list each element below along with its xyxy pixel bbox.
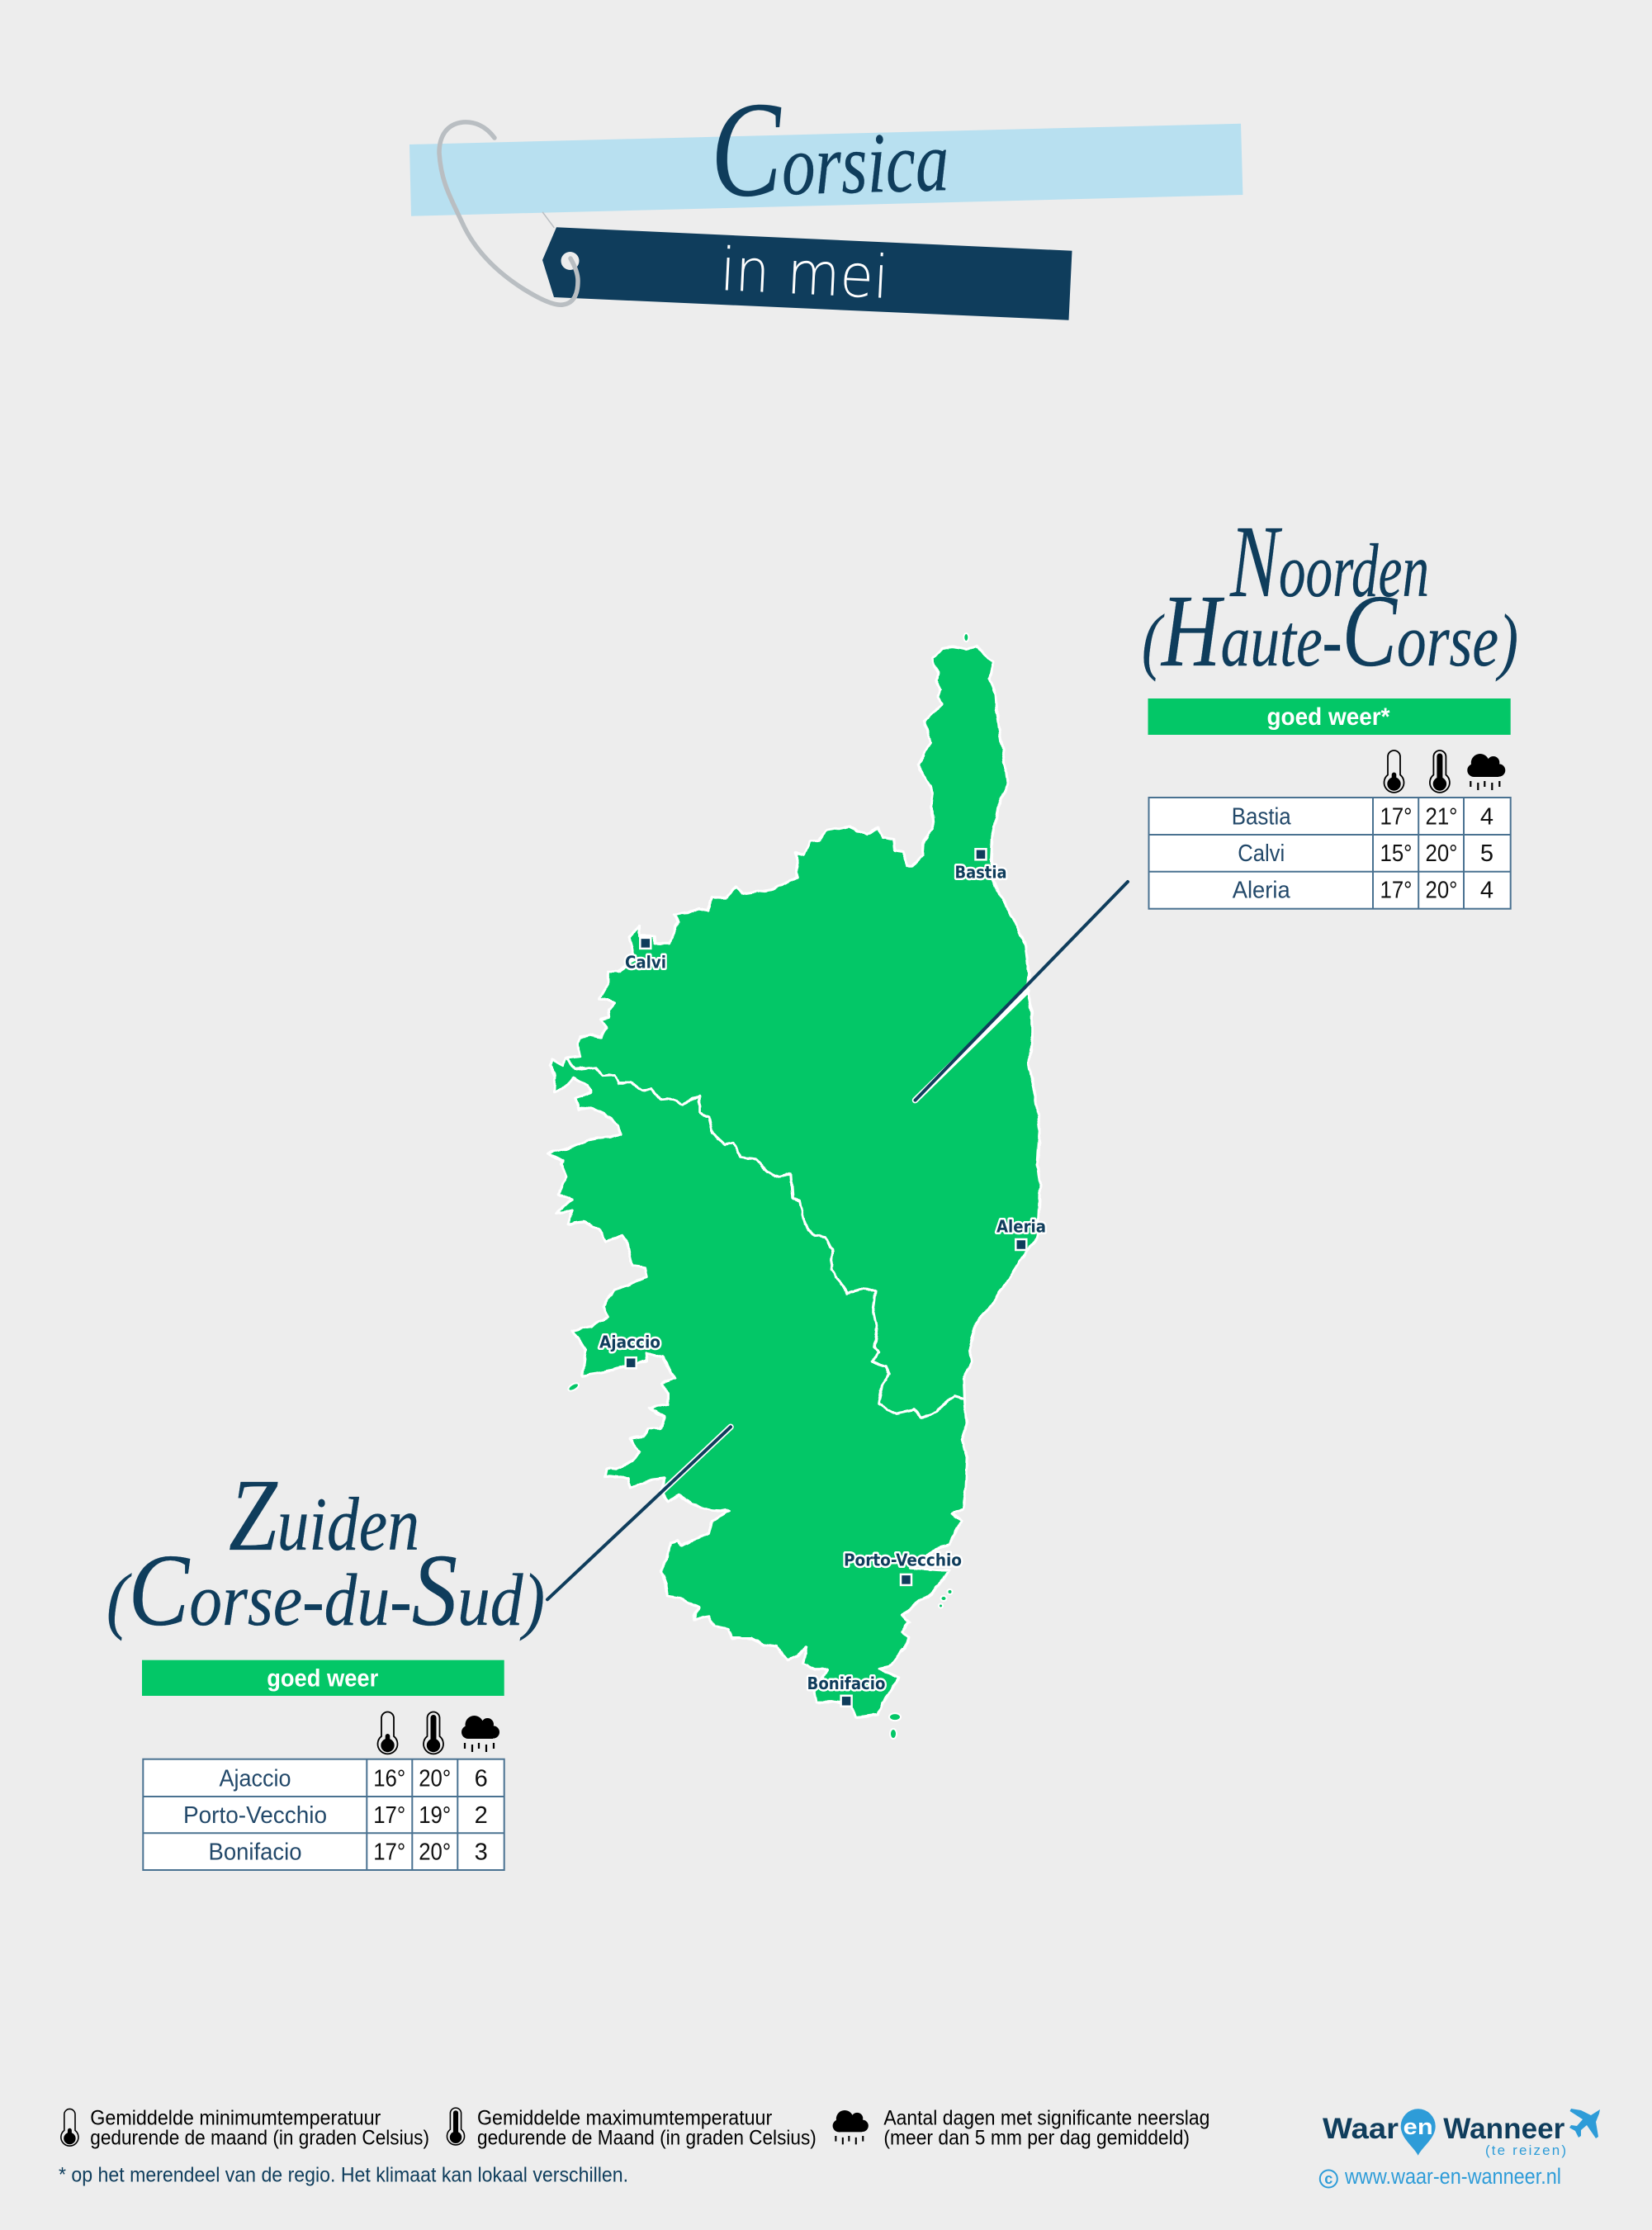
legend text: rain: Aantal dagen met significante neerslag bbox=[883, 2106, 1209, 2129]
heading: Zuiden: Zuiden bbox=[229, 1459, 419, 1573]
city: Bonifacio bbox=[807, 1674, 885, 1707]
heading: Noorden: Noorden bbox=[1229, 505, 1429, 619]
weather bar bbox=[142, 1660, 504, 1696]
climate table: 4 bbox=[1480, 803, 1493, 830]
climate table: 19° bbox=[419, 1802, 451, 1829]
climate table bbox=[143, 1759, 504, 1870]
city: Ajaccio: Ajaccio bbox=[599, 1333, 660, 1352]
tag: dark blue bbox=[542, 227, 1072, 320]
footnote: * op het merendeel van de regio. Het klimaat kan lokaal verschillen. bbox=[59, 2164, 628, 2187]
city: Bastia bbox=[954, 849, 1007, 882]
legend text: rain: (meer dan 5 mm per dag gemiddeld) bbox=[883, 2126, 1190, 2149]
legend icon: rain bbox=[833, 2110, 869, 2144]
legend bbox=[59, 2106, 1209, 2187]
heading: Corse-du-Sud: (Corse-du-Sud) bbox=[107, 1534, 545, 1648]
climate table: 17° bbox=[373, 1839, 405, 1866]
logo text: Waar: Waar bbox=[1323, 2113, 1399, 2145]
city: Porto-Vecchio: Porto-Vecchio bbox=[844, 1551, 962, 1570]
website: c bbox=[1324, 2171, 1332, 2187]
legend text: maximum temperature: gedurende de Maand (in graden Celsius) bbox=[477, 2126, 817, 2149]
tag hole bbox=[561, 252, 580, 270]
legend text: minimum temperature: gedurende de maand (in graden Celsius) bbox=[90, 2126, 429, 2149]
climate table: 2 bbox=[475, 1802, 488, 1829]
icon: plane bbox=[1569, 2109, 1600, 2138]
city: Aleria bbox=[996, 1217, 1046, 1250]
legend text: minimum temperature: Gemiddelde minimumtemperatuur bbox=[90, 2106, 381, 2129]
legend text: maximum temperature: Gemiddelde maximumtemperatuur bbox=[477, 2106, 772, 2129]
website: www.waar-en-wanneer.nl bbox=[1344, 2164, 1561, 2189]
logo bbox=[1320, 2109, 1600, 2189]
legend text: maximum temperature bbox=[477, 2106, 817, 2149]
climate table: 15° bbox=[1380, 840, 1412, 867]
climate table: 16° bbox=[373, 1765, 405, 1792]
subtitle: in mei: in mei bbox=[719, 234, 890, 312]
legend text: minimum temperature bbox=[90, 2106, 429, 2149]
climate table: 20° bbox=[419, 1765, 451, 1792]
climate table: 17° bbox=[373, 1802, 405, 1829]
title: Corsica: Corsica bbox=[708, 69, 950, 226]
heading: Haute-Corse: (Haute-Corse) bbox=[1142, 575, 1518, 689]
city: Porto-Vecchio bbox=[844, 1551, 962, 1585]
climate table: 20° bbox=[419, 1839, 451, 1866]
climate table: Aleria bbox=[1233, 878, 1291, 904]
legend icon: maximum temperature bbox=[447, 2108, 465, 2145]
city: Ajaccio bbox=[599, 1333, 660, 1368]
regional border bbox=[566, 1058, 964, 1418]
callout line south bbox=[547, 1427, 731, 1599]
city: Bonifacio: Bonifacio bbox=[807, 1674, 885, 1693]
logo pin: en bbox=[1403, 2114, 1433, 2139]
weather bar: goed weer bbox=[267, 1665, 378, 1693]
icon: rain bbox=[1467, 754, 1505, 790]
city: Calvi: Calvi bbox=[625, 953, 666, 973]
title ribbon: light blue bbox=[409, 124, 1243, 216]
small islands bbox=[567, 633, 968, 1739]
icon: maximum temperature bbox=[1430, 750, 1450, 793]
legend text: rain bbox=[883, 2106, 1209, 2149]
weather bar: goed weer* bbox=[1266, 703, 1390, 731]
weather bar bbox=[1148, 698, 1511, 735]
callout line north bbox=[915, 882, 1128, 1101]
climate table: 20° bbox=[1425, 840, 1458, 867]
climate table: 4 bbox=[1480, 878, 1493, 904]
climate table: 6 bbox=[475, 1765, 488, 1792]
climate table: 20° bbox=[1425, 878, 1458, 904]
climate table: Bastia bbox=[1232, 803, 1291, 830]
climate table: 5 bbox=[1480, 840, 1493, 867]
climate table: Porto-Vecchio bbox=[183, 1802, 327, 1829]
climate table bbox=[1149, 798, 1511, 909]
climate table: Bonifacio bbox=[208, 1839, 302, 1866]
climate table: 21° bbox=[1425, 803, 1458, 830]
climate table: Calvi bbox=[1238, 840, 1285, 867]
city: Aleria: Aleria bbox=[996, 1217, 1046, 1237]
climate table: 17° bbox=[1380, 878, 1412, 904]
title block bbox=[409, 69, 1243, 320]
tag string bbox=[439, 122, 578, 305]
icon: minimum temperature bbox=[1384, 750, 1403, 793]
panel: Noorden bbox=[1142, 505, 1518, 909]
climate table: 17° bbox=[1380, 803, 1412, 830]
climate table: Ajaccio bbox=[220, 1765, 291, 1792]
city: Calvi bbox=[625, 938, 666, 973]
city: Bastia: Bastia bbox=[954, 862, 1007, 882]
icon: rain bbox=[462, 1716, 499, 1752]
logo text: Wanneer: Wanneer bbox=[1443, 2113, 1565, 2145]
island outline bbox=[547, 646, 1040, 1717]
logo tagline: (te reizen) bbox=[1485, 2142, 1566, 2158]
panel: Zuiden bbox=[107, 1459, 545, 1870]
map of Corsica bbox=[547, 633, 1128, 1739]
logo pin bbox=[1401, 2109, 1436, 2156]
icon: maximum temperature bbox=[424, 1712, 443, 1754]
icon: minimum temperature bbox=[378, 1712, 398, 1754]
legend icon: minimum temperature bbox=[61, 2109, 78, 2146]
climate table: 3 bbox=[475, 1839, 488, 1866]
